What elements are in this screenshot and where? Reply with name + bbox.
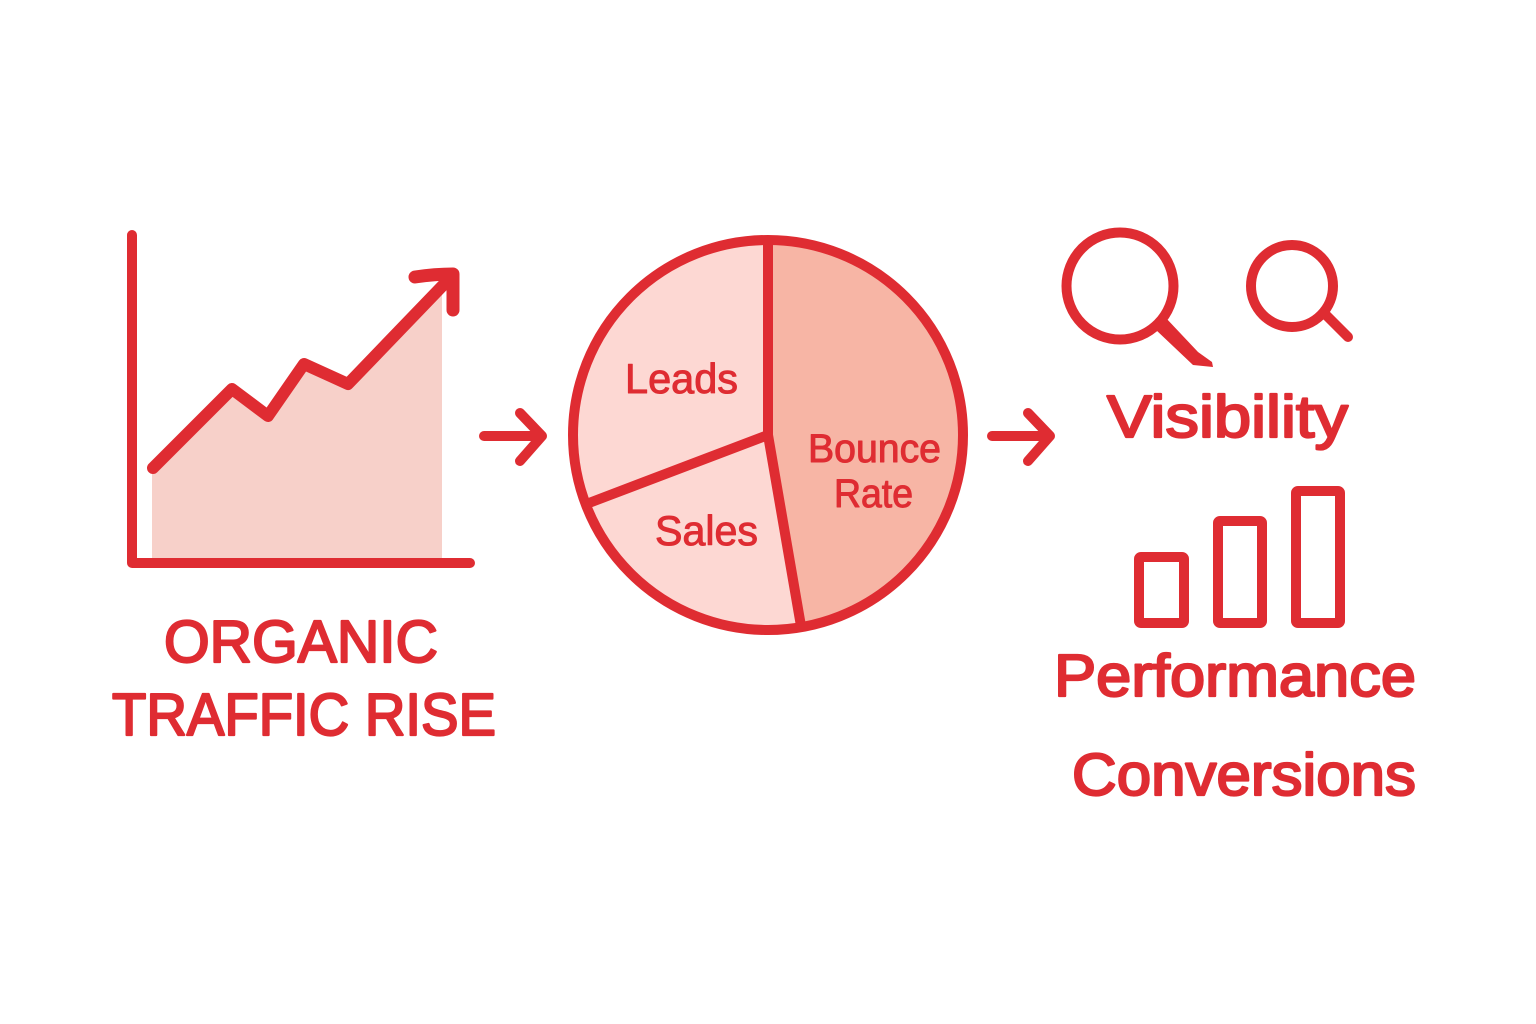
label: bounce rate: Bounce <box>808 427 941 471</box>
label: bounce rate: Rate <box>834 472 913 516</box>
label: conversions: Conversions <box>1072 742 1416 808</box>
icon: small magnifying glass <box>1251 245 1348 337</box>
icon: performance bars <box>1139 491 1340 623</box>
area line chart: organic traffic <box>132 235 470 563</box>
chart axes <box>132 235 470 563</box>
arrow: pie to outcomes <box>992 413 1050 461</box>
label: visibility: Visibility <box>1107 384 1349 450</box>
slice: sales <box>590 435 800 629</box>
heading: organic traffic rise: ORGANIC <box>164 609 438 675</box>
slice: leads <box>578 240 768 503</box>
chart area fill <box>152 293 442 558</box>
pie outline and dividers <box>573 240 963 630</box>
rising trend line with arrow <box>153 274 453 468</box>
slice: bounce rate <box>768 240 961 627</box>
heading: organic traffic rise: TRAFFIC RISE <box>112 682 496 748</box>
label: performance: Performance <box>1054 643 1416 709</box>
pie chart <box>573 240 963 630</box>
label: bounce rate <box>808 427 941 516</box>
heading: organic traffic rise <box>112 609 496 748</box>
label: sales: Sales <box>655 507 758 554</box>
label: leads: Leads <box>625 355 738 402</box>
arrow: chart to pie <box>484 413 542 461</box>
icon: large magnifying glass <box>1066 232 1213 367</box>
